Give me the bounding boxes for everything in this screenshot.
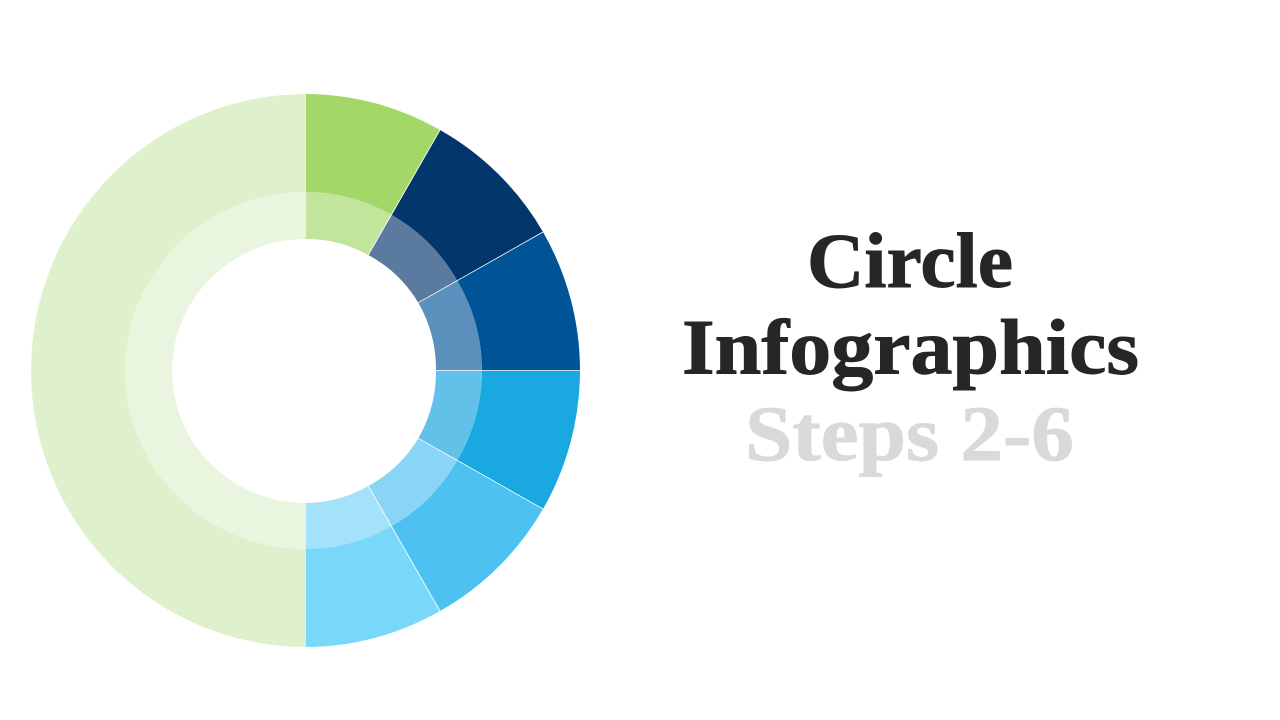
circle diagram [31,94,580,647]
title line: Infographics: Infographics [682,304,1139,390]
segment: pale green half [31,94,306,647]
title line: Circle: Circle [807,217,1013,304]
segment: sky blue [368,438,543,611]
segment: dark blue [418,232,580,370]
segment: green [306,94,440,255]
title [682,217,1139,477]
subtitle: Steps 2-6 [745,390,1074,477]
segment: navy [368,130,543,303]
segment: light blue [306,486,440,647]
segment: bright blue [418,370,580,509]
